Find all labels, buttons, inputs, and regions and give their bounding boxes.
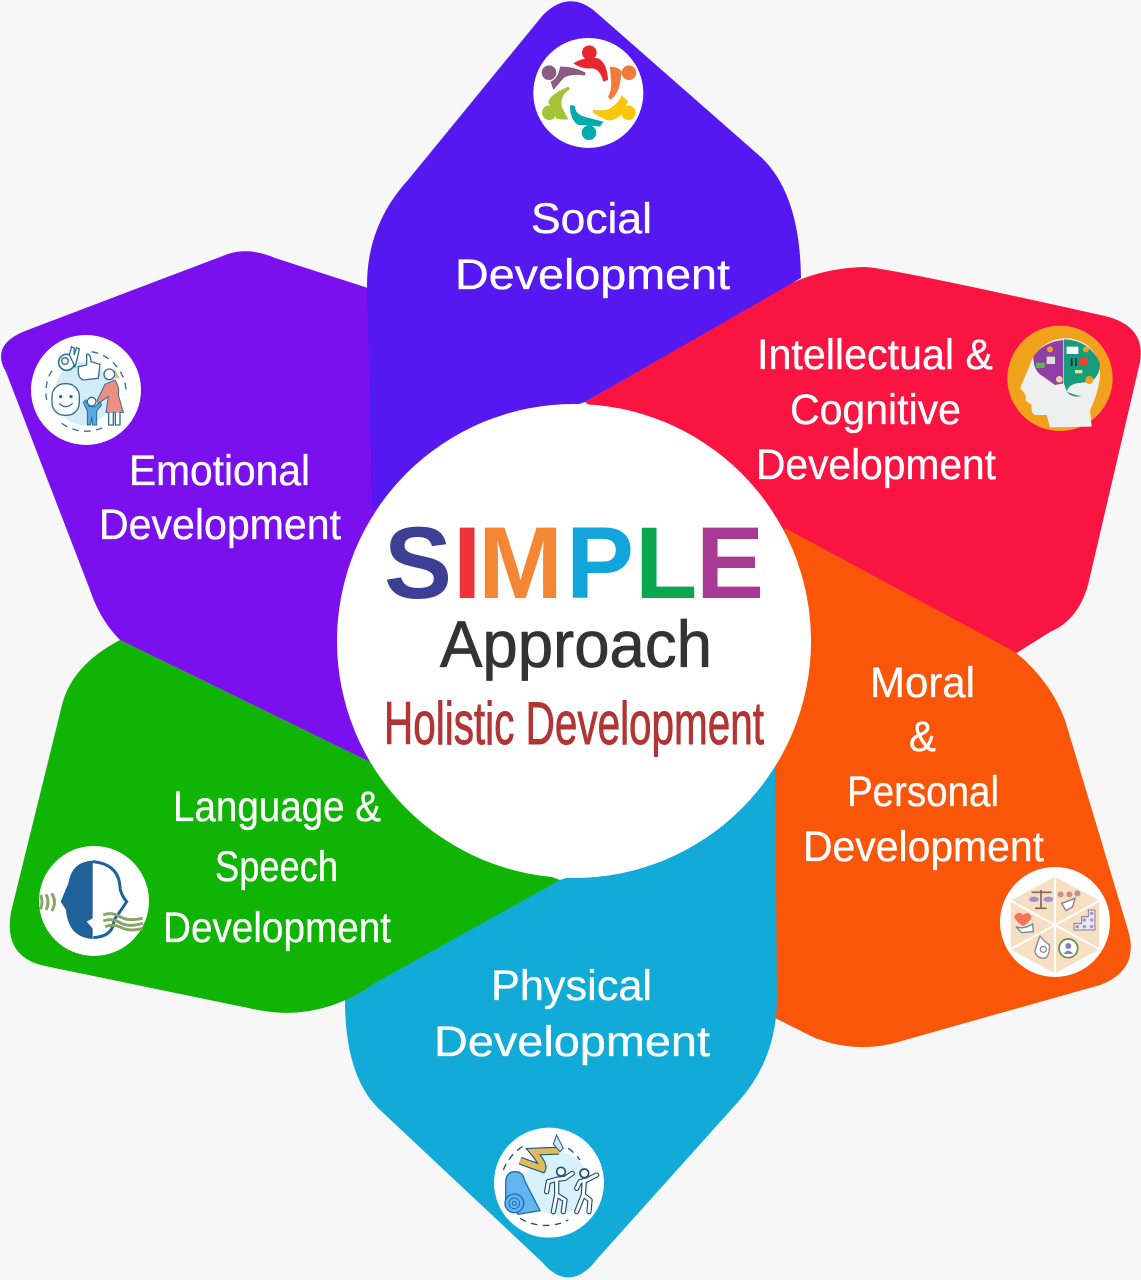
label: Intellectual and Cognitive Development: Development: [756, 441, 996, 489]
label: Moral and Personal Development: &: [909, 713, 936, 761]
petal: intellectual and cognitive development: [585, 267, 1141, 654]
label: Physical Development: Physical: [491, 962, 652, 1010]
label: Moral and Personal Development: [803, 659, 1044, 871]
label: Language and Speech Development: Language &: [173, 783, 381, 831]
label: Intellectual and Cognitive Development: [756, 331, 996, 489]
label: Social Development: Social: [531, 195, 652, 243]
icon: brain and head in orange circle: [1007, 326, 1113, 431]
label: Social Development: Development: [455, 251, 730, 299]
label: Emotional Development: Development: [99, 501, 341, 549]
label: Emotional Development: [99, 447, 341, 549]
icon: physical exercise: [494, 1128, 604, 1238]
heading: Approach: Approach: [440, 607, 712, 681]
subheading: Holistic Development: Holistic Development: [384, 690, 764, 757]
label: Moral and Personal Development: Development: [803, 823, 1044, 871]
label: Physical Development: Development: [434, 1018, 710, 1066]
icon: speaking head: [39, 846, 149, 956]
label: Intellectual and Cognitive Development: Intellectual &: [757, 331, 993, 379]
icon: moral hexagon of symbols: [1000, 867, 1110, 977]
label: Intellectual and Cognitive Development: Cognitive: [790, 386, 961, 434]
petal: emotional development: [1, 251, 450, 762]
label: Emotional Development: Emotional: [129, 447, 310, 495]
petal: moral and personal development: [700, 528, 1131, 1047]
label: Social Development: [455, 195, 730, 299]
central circle: [337, 404, 811, 878]
petal: social development: [367, 1, 801, 510]
label: Language and Speech Development: Development: [163, 904, 391, 952]
label: Moral and Personal Development: Moral: [870, 659, 975, 707]
icon: social circle of people: [533, 38, 643, 148]
icon: emotional family and smile: [31, 335, 141, 445]
title: SIMPLE: SIMPLE: [384, 506, 764, 620]
label: Moral and Personal Development: Personal: [847, 768, 999, 816]
petal: physical development: [345, 765, 777, 1278]
label: Language and Speech Development: Speech: [215, 843, 338, 891]
label: Physical Development: [434, 962, 710, 1066]
label: Language and Speech Development: [163, 783, 391, 952]
petal: language and speech development: [10, 640, 560, 1013]
